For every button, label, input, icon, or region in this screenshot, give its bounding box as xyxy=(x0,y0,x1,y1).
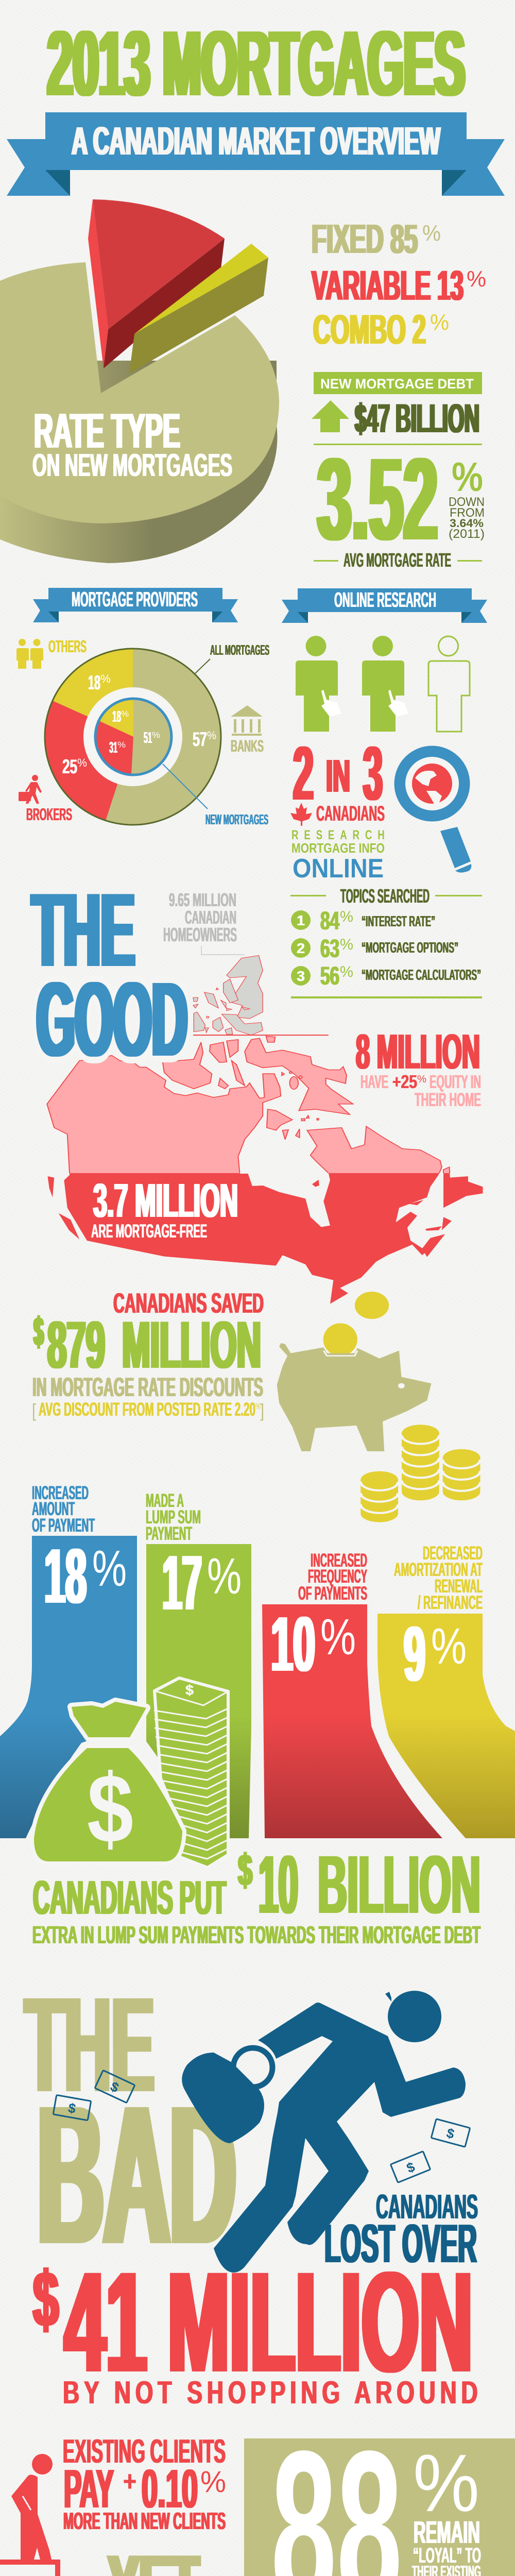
homeowners label: HOMEOWNERS xyxy=(163,924,237,946)
rate type legend: % xyxy=(430,310,449,335)
topic 1: 84 xyxy=(320,906,339,935)
bar: decreased amortization xyxy=(377,1543,515,1838)
stat: existing clients pay more: MORE THAN NEW CLIENTS xyxy=(63,2507,226,2534)
stat: existing clients pay more: EXISTING CLIENTS xyxy=(63,2432,226,2470)
panel: 88 percent remain loyal: % xyxy=(413,2438,479,2529)
bar: increased frequency: 10 xyxy=(271,1600,315,1687)
bar: increased frequency: FREQUENCY xyxy=(308,1566,367,1587)
pie label: ON NEW MORTGAGES xyxy=(32,448,232,483)
bar: decreased amortization: 9 xyxy=(404,1610,425,1697)
donut chart: mortgage providers xyxy=(45,649,221,825)
donut percentages xyxy=(62,672,216,778)
heading: the good: THE xyxy=(32,872,135,989)
text: GOOD xyxy=(37,960,187,1078)
bar: lump sum: LUMP SUM xyxy=(146,1506,201,1528)
icon: falling bills: $ xyxy=(108,2078,122,2096)
average mortgage rate: % xyxy=(452,454,483,500)
stat: 10 billion lump sum: 10 xyxy=(259,1838,298,1930)
donut percentages: % xyxy=(207,729,216,742)
rate type legend: FIXED 85 xyxy=(312,216,418,262)
topic 3: 3 xyxy=(297,968,305,984)
bar: increased amount: INCREASED xyxy=(32,1482,89,1503)
donut percentages: % xyxy=(100,672,111,685)
rate type legend: COMBO 2 xyxy=(313,307,426,353)
donut percentages: 18 xyxy=(112,707,121,725)
stat: 8 million: % xyxy=(417,1074,426,1085)
topic 2: % xyxy=(340,936,353,953)
icon: money bag: $ xyxy=(87,1754,133,1863)
bar: increased amount: AMOUNT xyxy=(32,1498,75,1519)
heading: the bad: THE xyxy=(25,1969,154,2120)
3D pie chart: rate type xyxy=(0,199,279,563)
legend: others: OTHERS xyxy=(48,637,87,656)
bar: increased amount: OF PAYMENT xyxy=(32,1515,95,1536)
bar: increased frequency: OF PAYMENTS xyxy=(298,1583,367,1604)
new mortgage debt: NEW MORTGAGE DEBT xyxy=(320,376,474,392)
text: GOOD xyxy=(37,960,187,1078)
icon: slouching person on stairs xyxy=(0,2454,106,2576)
topic 3 xyxy=(291,961,481,990)
section banner: mortgage providers xyxy=(33,587,238,622)
icon: money bag xyxy=(34,1702,182,1863)
stat: existing clients pay more: 0.10 xyxy=(142,2459,198,2519)
bar: increased amount: 18 xyxy=(44,1532,87,1619)
icon: falling bills: $ xyxy=(67,2100,77,2116)
stat: 3.7 million: 3.7 MILLION xyxy=(93,1174,238,1227)
donut percentages: % xyxy=(121,709,129,719)
average mortgage rate: DOWN xyxy=(449,495,485,509)
icon: 2 in 3 people xyxy=(296,636,470,732)
legend: new mortgages xyxy=(163,764,268,827)
icon: stack of bills: $ xyxy=(185,1682,194,1698)
stat: canadians saved: CANADIANS SAVED xyxy=(113,1287,264,1319)
donut percentages: 31 xyxy=(109,738,117,756)
bar: lump sum: % xyxy=(207,1548,242,1604)
stat: 3.7 million: ARE MORTGAGE-FREE xyxy=(91,1221,207,1242)
heading: the good xyxy=(32,872,187,1078)
text: ALL MORTGAGES xyxy=(210,642,269,658)
average mortgage rate: (2011) xyxy=(449,527,485,541)
stat: canadians saved: MILLION xyxy=(122,1307,261,1382)
legend: all mortgages xyxy=(195,642,269,673)
bar: increased frequency: INCREASED xyxy=(311,1550,367,1571)
average mortgage rate: 3.64% xyxy=(450,517,484,530)
stat: canadians lost over 41 million xyxy=(33,2188,478,2411)
stat: 2 in 3 Canadians: ONLINE xyxy=(293,854,384,884)
legend: others xyxy=(16,637,87,669)
legend: brokers: BROKERS xyxy=(26,805,72,824)
stat: 10 billion lump sum: $ xyxy=(238,1844,252,1895)
new mortgage debt xyxy=(312,372,482,445)
stat: canadians lost over 41 million: BY NOT SHOPPING AROUND xyxy=(63,2375,478,2411)
stat: canadians saved: 879 xyxy=(47,1307,105,1382)
stat: 2 in 3 Canadians: RESEARCH xyxy=(291,827,385,842)
stat: 2 in 3 Canadians: 2 xyxy=(293,731,314,816)
stat: canadians saved: AVG DISCOUNT FROM POSTED RATE 2.20 xyxy=(39,1399,255,1420)
bar: lump sum xyxy=(146,1490,251,1838)
heading: the bad xyxy=(25,1969,236,2285)
stat: 10 billion lump sum: CANADIANS PUT xyxy=(33,1871,226,1924)
bar: lump sum: 17 xyxy=(162,1539,202,1626)
section banner: mortgage providers: MORTGAGE PROVIDERS xyxy=(72,587,198,611)
icon: stack of bills xyxy=(154,1678,228,1868)
pie label xyxy=(32,403,232,483)
bar: decreased amortization: % xyxy=(431,1618,467,1674)
topic 2: 2 xyxy=(297,940,305,956)
topic 2 xyxy=(291,934,458,963)
stat: canadians saved: $ xyxy=(33,1309,44,1354)
stat: 2 in 3 Canadians xyxy=(290,731,385,884)
homeowners label: 9.65 MILLION xyxy=(169,889,236,910)
section banner: online research xyxy=(282,588,487,623)
topic 1: “INTEREST RATE” xyxy=(362,913,435,930)
topic 1 xyxy=(291,906,435,935)
legend: banks xyxy=(231,705,264,755)
stat: existing clients pay more xyxy=(63,2432,226,2534)
donut percentages: 25 xyxy=(62,756,77,778)
ribbon banner: subtitle xyxy=(7,112,505,196)
rate type legend: % xyxy=(422,221,441,246)
icon: running man with bag xyxy=(182,1991,466,2273)
bar: increased frequency xyxy=(262,1550,442,1838)
homeowners label xyxy=(163,889,245,955)
stat: existing clients pay more: PAY xyxy=(64,2459,114,2519)
stat: 2 in 3 Canadians: CANADIANS xyxy=(316,801,385,825)
stat: canadians saved: IN MORTGAGE RATE DISCOUNTS xyxy=(32,1372,263,1402)
bar: increased frequency: % xyxy=(320,1608,356,1665)
icon: magnifying glass with globe xyxy=(394,746,471,873)
stat: 8 million: +25 xyxy=(392,1071,417,1092)
bar chart: payment behaviours xyxy=(0,1482,515,1838)
rate type legend xyxy=(312,216,486,353)
stat: canadians lost over 41 million: $ xyxy=(33,2255,59,2344)
donut percentages: 57 xyxy=(193,728,207,751)
average mortgage rate: FROM xyxy=(450,506,485,520)
stat: 8 million xyxy=(356,1024,481,1110)
stat: 2 in 3 Canadians: MORTGAGE INFO xyxy=(291,840,385,856)
icon: falling bills: $ xyxy=(404,2159,417,2176)
stat: canadians saved xyxy=(32,1287,264,1421)
topic 2: 63 xyxy=(320,934,339,963)
pie label: RATE TYPE xyxy=(34,403,180,459)
donut percentages: % xyxy=(77,756,87,769)
bar: lump sum: MADE A xyxy=(146,1490,184,1511)
bar: lump sum: PAYMENT xyxy=(146,1523,192,1544)
bar: increased amount xyxy=(0,1482,137,1838)
stat: canadians saved: ] xyxy=(260,1400,264,1421)
icon: falling bills xyxy=(53,2070,470,2182)
homeowners label: CANADIAN xyxy=(185,907,236,928)
stat: 2 in 3 Canadians: 3 xyxy=(363,731,383,816)
icon: piggy bank with coins xyxy=(277,1292,431,1451)
topics searched xyxy=(290,886,482,998)
icon: up arrow xyxy=(312,400,349,432)
icon: falling bills: $ xyxy=(445,2125,456,2142)
rate type legend: % xyxy=(467,266,486,292)
topic 3: 56 xyxy=(320,961,339,990)
stat: 2 in 3 Canadians: IN xyxy=(326,751,350,802)
text: BAD xyxy=(38,2064,236,2285)
stat: 3.7 million xyxy=(91,1174,238,1242)
donut percentages: % xyxy=(152,730,160,740)
icon: maple leaf xyxy=(290,803,312,826)
donut percentages: 51 xyxy=(144,728,152,747)
bar: increased amount: % xyxy=(92,1540,127,1597)
stat: existing clients pay more: % xyxy=(200,2465,226,2499)
topic 1: 1 xyxy=(297,912,305,928)
legend: brokers xyxy=(19,775,72,824)
stat: 10 billion lump sum xyxy=(32,1838,480,1949)
stat: canadians saved: [ xyxy=(32,1400,36,1421)
stat: existing clients pay more: + xyxy=(123,2465,136,2497)
text: NEW MORTGAGES xyxy=(205,811,268,827)
topic 3: % xyxy=(340,963,353,980)
donut percentages: % xyxy=(117,740,126,750)
map of Canada xyxy=(47,956,483,1304)
stat: canadians saved: % xyxy=(255,1401,261,1411)
stat: 8 million: HAVE xyxy=(360,1071,388,1092)
icon: coin stacks xyxy=(360,1425,480,1522)
legend: banks: BANKS xyxy=(231,737,264,755)
topic 1: % xyxy=(340,908,353,925)
donut percentages: 18 xyxy=(88,672,100,694)
